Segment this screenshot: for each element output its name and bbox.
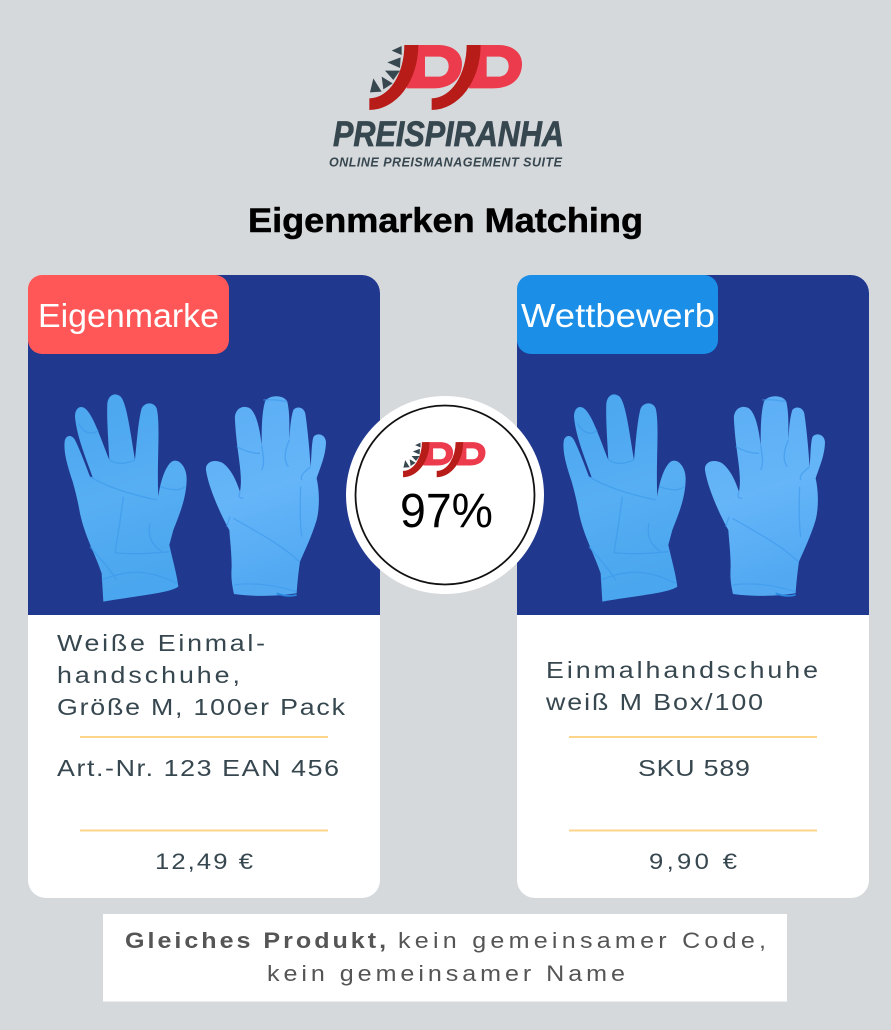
match score badge [346, 396, 544, 594]
badge: Wettbewerb [517, 275, 718, 354]
badge: Eigenmarke: Eigenmarke [38, 297, 219, 334]
caption box: kein gemeinsamer Name [267, 961, 625, 986]
caption box: kein gemeinsamer Code, [398, 928, 766, 953]
icon: blue gloves [563, 394, 825, 602]
title: Eigenmarken Matching [248, 202, 643, 240]
price: 9,90 € [649, 849, 738, 875]
product image background [28, 275, 380, 615]
logo: Preispiranha: ONLINE PREISMANAGEMENT SUITE [329, 156, 563, 170]
logo: Preispiranha: PREISPIRANHA [333, 115, 564, 154]
article number: Art.-Nr. 123 EAN 456 [57, 755, 339, 782]
caption box [103, 914, 787, 1002]
icon: small logo [403, 442, 485, 477]
caption box: Gleiches Produkt, [125, 928, 386, 953]
score value: 97% [400, 485, 493, 538]
price: 12,49 € [155, 849, 254, 875]
product name: handschuhe, [57, 662, 240, 689]
logo: Preispiranha [329, 45, 564, 169]
panel: Eigenmarke [28, 275, 380, 898]
product name: Einmalhandschuhe [546, 657, 818, 684]
product name: Weiße Einmal- [57, 630, 265, 657]
card body [517, 275, 869, 898]
SKU: SKU 589 [638, 755, 750, 782]
product name [57, 630, 345, 721]
product image background [517, 275, 869, 615]
product name: weiß M Box/100 [545, 689, 763, 716]
card body [28, 275, 380, 898]
icon: blue gloves [64, 394, 326, 602]
product name [545, 657, 818, 716]
panel: Wettbewerb [517, 275, 869, 898]
badge: Wettbewerb: Wettbewerb [521, 297, 715, 334]
product name: Größe M, 100er Pack [57, 694, 345, 721]
badge: Eigenmarke [28, 275, 229, 354]
